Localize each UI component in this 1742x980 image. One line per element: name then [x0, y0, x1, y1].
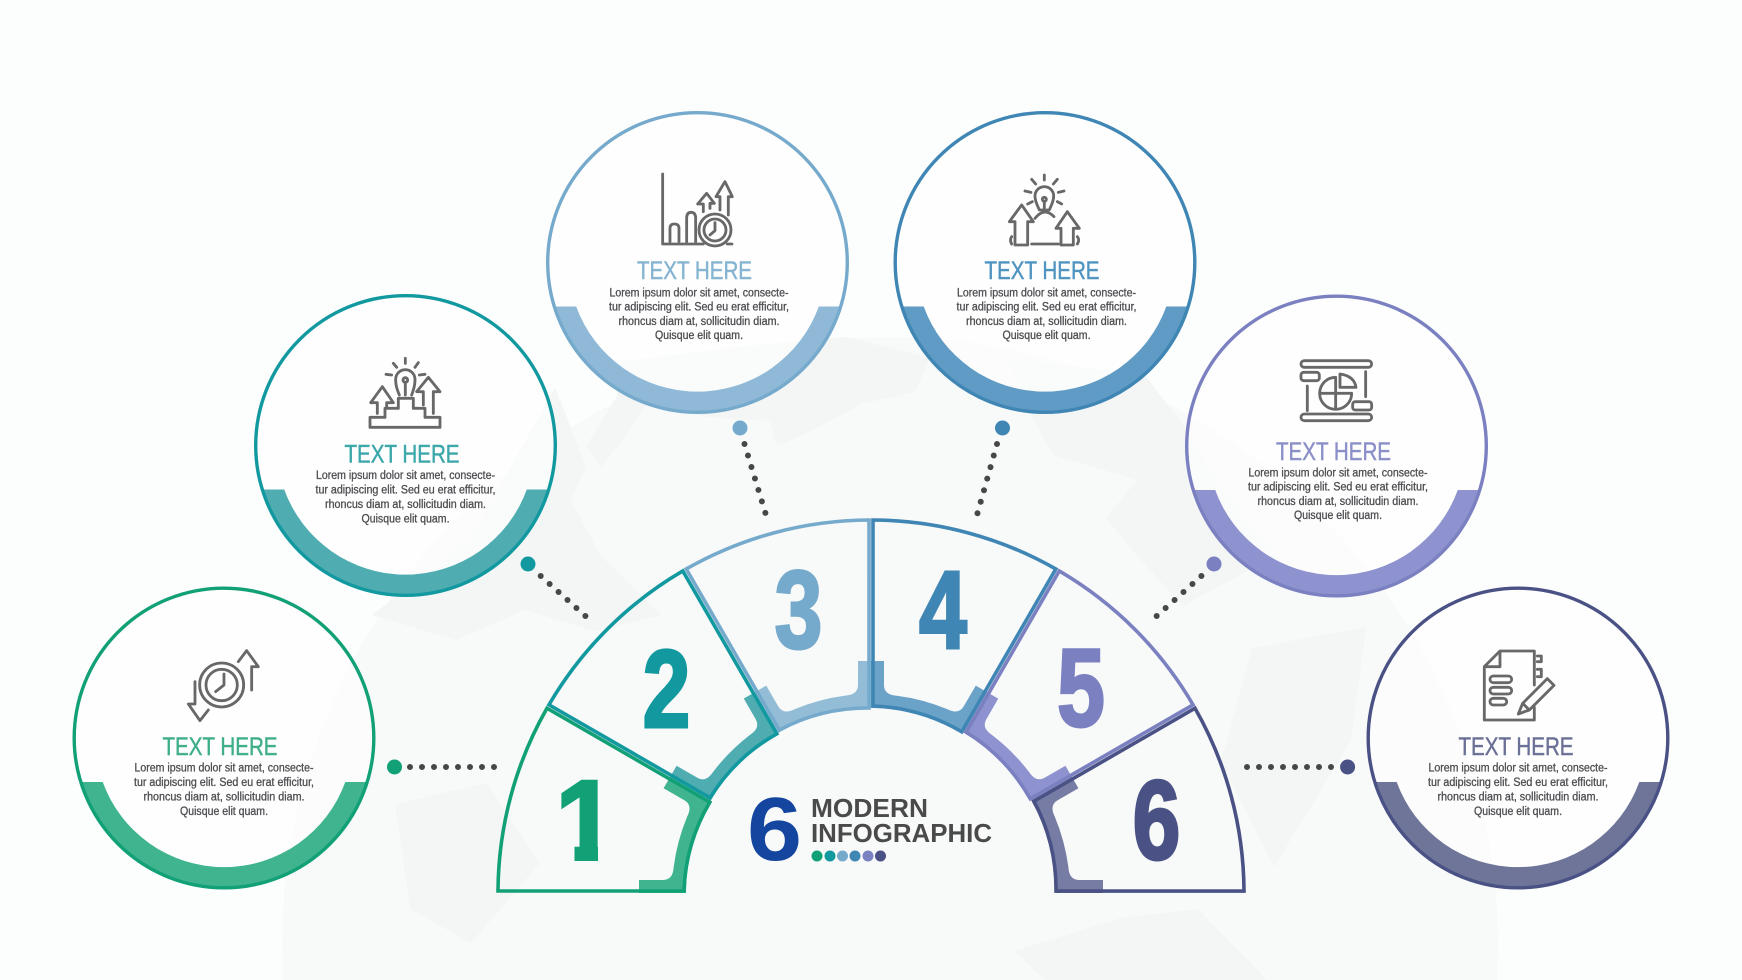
text block: step 6: tur adipiscing elit. Sed eu erat efficitur, [1428, 777, 1608, 789]
connector: step 4 [977, 420, 1010, 515]
text block: step 1: Lorem ipsum dolor sit amet, consecte- [134, 763, 314, 775]
text block: step 6: rhoncus diam at, sollicitudin diam. [1438, 792, 1598, 804]
semicircle chart: numbered segments [496, 518, 1246, 893]
text block: step 2: tur adipiscing elit. Sed eu erat efficitur, [316, 485, 496, 497]
text block: step 6 [1428, 763, 1608, 818]
text block: step 3: Lorem ipsum dolor sit amet, consecte- [610, 288, 789, 300]
text block: step 3: Quisque elit quam. [655, 330, 743, 342]
text block: step 5: Lorem ipsum dolor sit amet, consecte- [1248, 468, 1428, 480]
connector: step 6 [1247, 760, 1355, 774]
icon: bulb on podium [370, 358, 440, 427]
text block: step 2: Lorem ipsum dolor sit amet, consecte- [316, 470, 495, 482]
connector: step 1 [387, 760, 495, 774]
segment 2 [548, 546, 825, 813]
icon: presentation pie chart [1301, 361, 1372, 421]
segment 6 [1010, 706, 1286, 973]
text block: step 5: tur adipiscing elit. Sed eu erat efficitur, [1248, 482, 1428, 494]
text block: step 2 [316, 470, 496, 526]
number 2: 2 [643, 628, 690, 750]
text block: step 3: rhoncus diam at, sollicitudin diam. [618, 316, 780, 328]
connector: step 5 [1155, 556, 1222, 618]
text block: step 1 [134, 763, 314, 818]
segment 4 [871, 520, 1056, 733]
segment 5 [951, 570, 1218, 847]
number 1: 1 [555, 756, 617, 884]
icon: document and pencil [1484, 651, 1554, 720]
heading: step 5: TEXT HERE [1276, 438, 1391, 466]
colour dots [812, 850, 886, 862]
panel: step 3 circle [548, 113, 847, 412]
text block: step 1: Quisque elit quam. [180, 806, 268, 818]
icon: clock with arrows [188, 651, 258, 721]
text block: step 4: tur adipiscing elit. Sed eu erat efficitur, [956, 302, 1136, 314]
number 5: 5 [1057, 627, 1105, 749]
segment 3 [684, 478, 951, 754]
title line: MODERN: MODERN [811, 793, 928, 823]
panel: step 2 circle [256, 296, 555, 595]
text block: step 2: rhoncus diam at, sollicitudin diam. [325, 499, 486, 511]
number 4: 4 [919, 549, 967, 671]
text block: step 3 [609, 288, 789, 342]
text block: step 4 [956, 288, 1136, 342]
text block: step 5: rhoncus diam at, sollicitudin diam. [1258, 496, 1418, 508]
panel: step 4 circle [895, 113, 1195, 412]
panel: step 5 circle [1187, 296, 1486, 596]
number 3: 3 [775, 549, 822, 671]
segment 1 [498, 708, 711, 893]
icon: bulb with arrows [1009, 175, 1079, 245]
heading: step 1: TEXT HERE [162, 733, 278, 761]
text block: step 2: Quisque elit quam. [362, 514, 450, 526]
heading: step 3: TEXT HERE [637, 257, 752, 285]
text block: step 1: rhoncus diam at, sollicitudin diam. [144, 792, 304, 804]
text block: step 6: Lorem ipsum dolor sit amet, consecte- [1428, 763, 1608, 775]
text block: step 5: Quisque elit quam. [1294, 510, 1382, 522]
text block: step 1: tur adipiscing elit. Sed eu erat efficitur, [134, 777, 314, 789]
connector: step 2 [520, 556, 587, 618]
title line: INFOGRAPHIC: INFOGRAPHIC [811, 818, 992, 848]
heading: step 2: TEXT HERE [344, 440, 460, 468]
panel: step 1 circle [74, 588, 374, 888]
text block: step 3: tur adipiscing elit. Sed eu erat efficitur, [609, 302, 789, 314]
icon: growth chart with clock [663, 174, 732, 246]
heading: step 6: TEXT HERE [1458, 733, 1574, 761]
text block: step 5 [1248, 468, 1428, 522]
text block: step 4: Quisque elit quam. [1002, 330, 1090, 342]
number 6: 6 [1133, 759, 1180, 884]
text block: step 6: Quisque elit quam. [1474, 806, 1562, 818]
heading: step 4: TEXT HERE [984, 257, 1100, 285]
panel: step 6 circle [1368, 588, 1668, 888]
center title block [747, 779, 992, 880]
text block: step 4: Lorem ipsum dolor sit amet, consecte- [957, 288, 1136, 300]
connector: step 3 [732, 420, 766, 515]
big numeral 6: 6 [747, 779, 802, 880]
text block: step 4: rhoncus diam at, sollicitudin diam. [966, 316, 1127, 328]
